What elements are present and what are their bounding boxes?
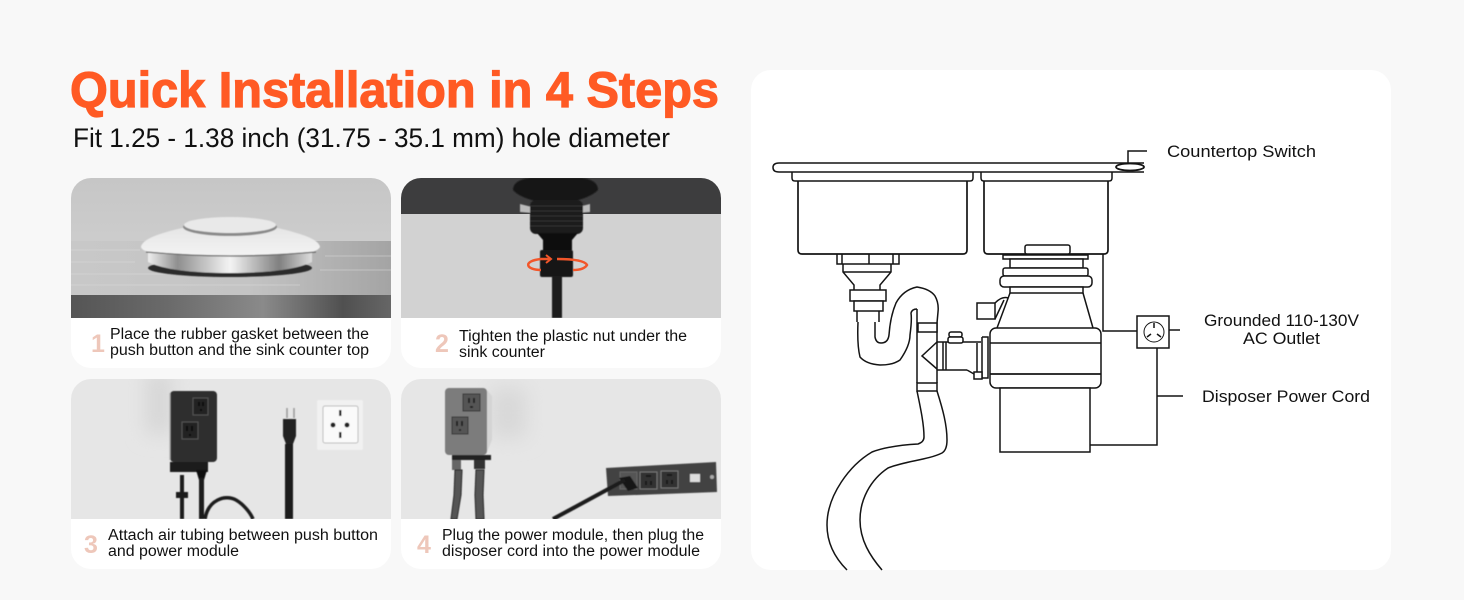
step number 4: 4: [417, 531, 431, 559]
lower drain hose: [827, 391, 947, 570]
outlet icon: [1137, 316, 1180, 348]
tee fitting: [917, 309, 937, 391]
panel: step 3: [71, 372, 391, 569]
step text 4: Plug the power module, then plug the: [442, 527, 704, 544]
photo: push button on counter: [71, 178, 391, 318]
subtitle: Fit 1.25 - 1.38 inch (31.75 - 35.1 mm) hole diameter: [73, 123, 670, 153]
step text 3: Attach air tubing between push button: [108, 527, 378, 544]
title: Quick Installation in 4 Steps: [70, 62, 719, 118]
right sink bowl: [981, 172, 1112, 254]
step text 1: Place the rubber gasket between the: [110, 326, 369, 343]
step text 4: disposer cord into the power module: [442, 543, 700, 560]
dishwasher connector: [937, 332, 988, 379]
photo: plugged power module and power strip: [401, 379, 721, 519]
left sink bowl: [792, 172, 973, 254]
step text 3: and power module: [108, 543, 239, 560]
step number 2: 2: [435, 330, 449, 358]
drain tailpiece: [837, 254, 899, 322]
step text 1: push button and the sink counter top: [110, 342, 369, 359]
label: countertop switch: Countertop Switch: [1167, 142, 1316, 161]
panel: step 2: [401, 178, 721, 368]
photo: plastic nut under counter: [401, 178, 721, 318]
panel: step 1: [71, 178, 391, 368]
photo: power module and wall socket: [71, 372, 391, 519]
countertop switch icon: [1116, 151, 1147, 170]
disposer unit: [977, 245, 1101, 452]
step text 2: sink counter: [459, 344, 545, 361]
label: disposer power cord: Disposer Power Cord: [1202, 387, 1370, 406]
disposer power cord line: [1090, 348, 1183, 445]
step text 2: Tighten the plastic nut under the: [459, 328, 687, 345]
panel: installation diagram: [751, 70, 1391, 570]
panel: step 4: [401, 379, 721, 569]
label: grounded outlet: AC Outlet: [1243, 329, 1320, 348]
air line to outlet: [1103, 254, 1137, 331]
label: grounded outlet: Grounded 110-130V: [1204, 311, 1360, 330]
step number 3: 3: [84, 531, 98, 559]
P-trap pipe: [858, 287, 938, 365]
sink countertop: [773, 163, 1144, 172]
icon: orange rotation arrow: [528, 255, 587, 270]
step number 1: 1: [91, 330, 105, 358]
